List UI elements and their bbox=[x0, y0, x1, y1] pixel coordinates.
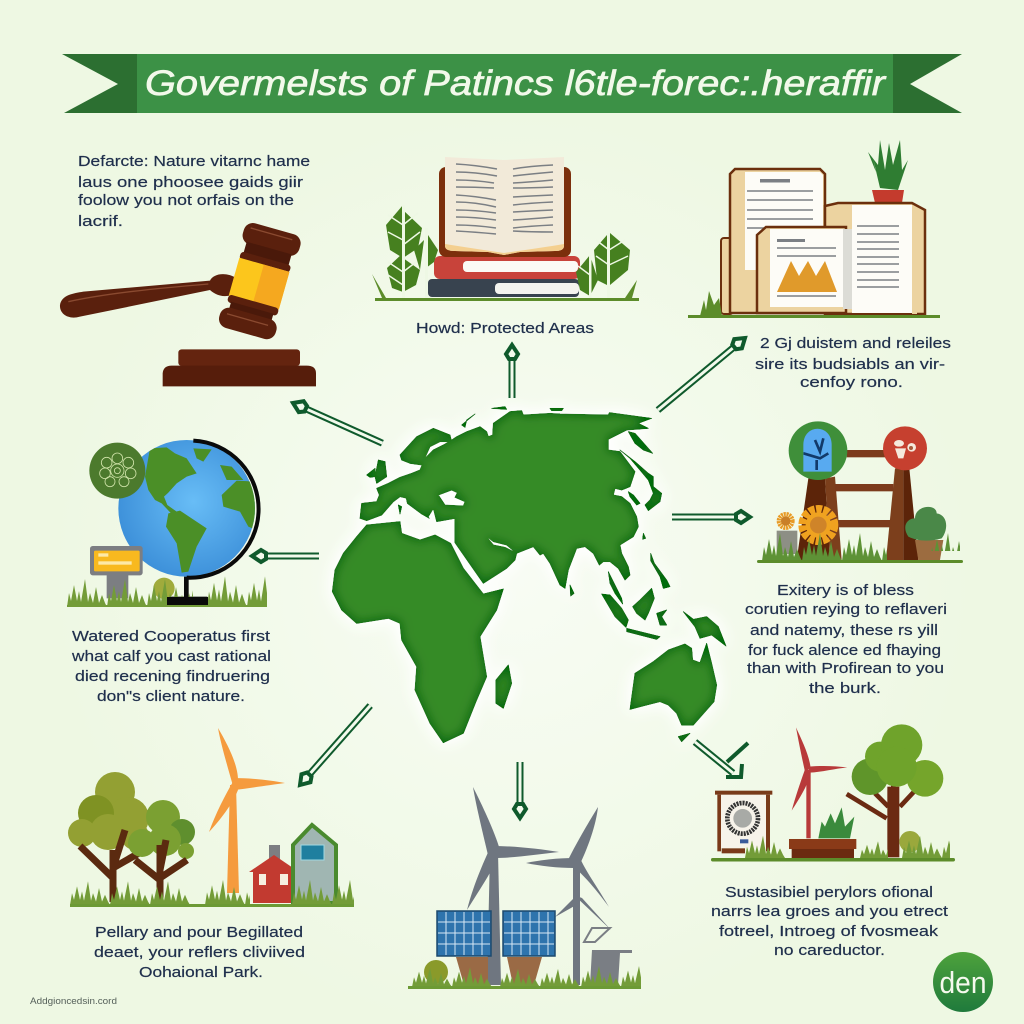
Italy bbox=[406, 497, 429, 518]
text block: top left: laus one phoosee gaids giir bbox=[78, 174, 303, 191]
chart: mountains bbox=[777, 261, 837, 292]
arrow: to globe bbox=[252, 550, 319, 562]
text block: top left: foolow you not orfais on the bbox=[78, 192, 294, 209]
icon: books and plants bbox=[372, 157, 639, 301]
globe sign bbox=[90, 546, 143, 598]
icon: emblem, turbine and tree bbox=[711, 724, 955, 862]
text block: bottom left: deaet, your reflers cliviived bbox=[94, 944, 305, 961]
text block: top right: cenfoy rono. bbox=[800, 374, 903, 391]
text block: top left: Defarcte: Nature vitarnc hame bbox=[78, 153, 310, 170]
plants right bbox=[576, 233, 637, 298]
icon: trees, turbine and houses bbox=[68, 728, 354, 907]
text block: bottom right: Sustasibiel perylors ofional bbox=[725, 884, 933, 901]
tree bbox=[847, 724, 943, 857]
arrow: to emblem scene bbox=[695, 742, 748, 777]
Malay peninsula bbox=[608, 572, 623, 604]
text block: bottom left: Oohaional Park. bbox=[139, 964, 263, 981]
Great Britain bbox=[375, 460, 387, 483]
book stack bbox=[428, 157, 580, 297]
icon: fence with emblems bbox=[757, 421, 963, 563]
text block: bottom right bbox=[711, 884, 949, 959]
turbine red bbox=[792, 727, 847, 838]
Taiwan bbox=[643, 533, 646, 539]
Australia bbox=[630, 643, 717, 725]
text block: middle left: Watered Cooperatus first bbox=[72, 628, 271, 645]
Java bbox=[627, 628, 660, 639]
grass and ground bbox=[700, 291, 722, 316]
text block: bottom right: no careductor. bbox=[774, 942, 885, 959]
globe badge bbox=[89, 443, 145, 499]
text block: bottom right: narrs lea groes and you etrect bbox=[711, 903, 949, 920]
arrow: to documents bbox=[654, 333, 749, 415]
back document bbox=[730, 169, 825, 313]
logo badge bbox=[933, 952, 993, 1012]
small flower pot bbox=[777, 514, 797, 554]
turbine orange bbox=[209, 728, 285, 893]
front book with chart bbox=[757, 227, 920, 318]
text block: bottom right: fotreel, Introeg of fvosmeak bbox=[719, 923, 938, 940]
arrow: to fence bbox=[672, 511, 750, 523]
tree small bbox=[128, 800, 195, 902]
text block: top left bbox=[78, 153, 310, 230]
New Guinea bbox=[683, 612, 726, 646]
text block: top right bbox=[755, 335, 951, 391]
icon: documents and open book bbox=[688, 140, 940, 318]
world map bbox=[332, 407, 726, 743]
text block: middle left: died recening findruering bbox=[75, 668, 270, 685]
solar panels bbox=[437, 911, 555, 985]
Scandinavia bbox=[400, 428, 452, 465]
text block: middle right: corutien reying to reflaveri bbox=[745, 601, 947, 618]
icon: gavel bbox=[60, 221, 316, 386]
label: protected areas: Howd: Protected Areas bbox=[416, 320, 594, 337]
logo badge: den bbox=[940, 965, 986, 1000]
planter bbox=[789, 807, 856, 858]
emblem: red circle bbox=[883, 426, 927, 470]
arrow: to wind and houses bbox=[296, 702, 375, 789]
arrow: to books bbox=[506, 345, 518, 398]
arrow: to gavel bbox=[291, 398, 385, 449]
Sicily bbox=[398, 505, 402, 514]
Africa bbox=[332, 522, 503, 743]
text block: bottom left bbox=[94, 924, 305, 981]
text block: middle right: than with Profirean to you bbox=[747, 660, 944, 677]
text block: middle left: what calf you cast rational bbox=[71, 648, 271, 665]
text block: top right: 2 Gj duistem and releiles bbox=[760, 335, 951, 352]
Eurasia bbox=[360, 411, 652, 588]
ground line bbox=[375, 298, 639, 301]
house green bbox=[293, 825, 336, 903]
grey bin bbox=[584, 928, 632, 985]
open book right bbox=[825, 203, 925, 314]
text block: bottom left: Pellary and pour Begillated bbox=[95, 924, 303, 941]
plants left bbox=[372, 205, 438, 298]
text block: top right: sire its budsiabls an vir- bbox=[755, 356, 945, 373]
Japan bbox=[620, 450, 662, 511]
potted bush bbox=[905, 507, 946, 560]
text block: middle right: and natemy, these rs yill bbox=[750, 622, 938, 639]
emblem: green circle bbox=[789, 421, 847, 480]
text block: top left: lacrif. bbox=[78, 213, 123, 230]
Sulawesi bbox=[657, 610, 667, 625]
Ireland bbox=[367, 468, 375, 477]
small turbines bbox=[526, 807, 611, 985]
Sumatra bbox=[602, 594, 628, 627]
emblem frame bbox=[715, 791, 772, 853]
title banner bbox=[62, 54, 962, 113]
Sri Lanka bbox=[570, 585, 574, 596]
Tasmania bbox=[678, 733, 690, 742]
footer credit: Addgioncedsin.cord bbox=[30, 996, 117, 1007]
Korea bbox=[628, 492, 640, 505]
Sakhalin bbox=[628, 432, 653, 453]
Philippines bbox=[651, 553, 670, 588]
Arctic isle bbox=[462, 414, 475, 427]
globe continents bbox=[145, 447, 257, 573]
arrow: to turbines bbox=[514, 762, 526, 818]
text block: middle right: the burk. bbox=[809, 680, 881, 697]
text block: middle right: for fuck alence ed fhaying bbox=[748, 642, 941, 659]
text block: middle left: don"s client nature. bbox=[97, 688, 245, 705]
gavel head bbox=[217, 221, 303, 341]
icon: turbines and solar panels bbox=[408, 787, 641, 989]
large turbine bbox=[467, 787, 559, 985]
text block: middle left bbox=[71, 628, 271, 705]
sunflower bbox=[803, 510, 834, 553]
Borneo bbox=[633, 588, 654, 620]
text block: middle right: Exitery is of bless bbox=[777, 582, 914, 599]
tree large bbox=[68, 772, 153, 902]
pot plant bbox=[868, 140, 908, 203]
title text: Govermelsts of Patincs l6tle-forec:.heraffir bbox=[145, 64, 887, 103]
house red bbox=[249, 845, 299, 903]
icon: globe bbox=[67, 440, 267, 607]
Madagascar bbox=[496, 665, 512, 708]
text block: middle right bbox=[745, 582, 947, 697]
